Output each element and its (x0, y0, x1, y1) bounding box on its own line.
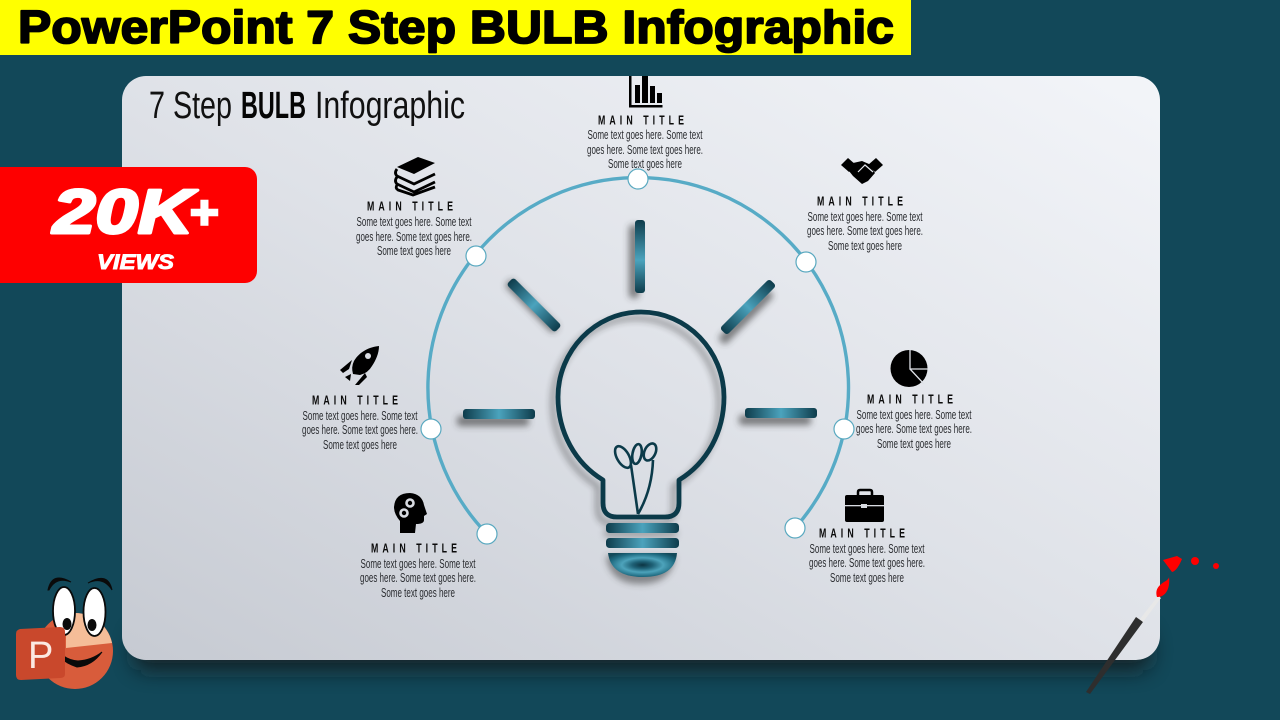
heading: slide title: BULB (241, 85, 306, 127)
step: lower left head: goes here. Some text goes here. (360, 571, 476, 585)
heading: slide title (149, 85, 465, 127)
badge: 20K+ views: 20K (52, 178, 198, 247)
step: right pie (856, 350, 972, 451)
step: upper right handshake: MAIN TITLE (817, 194, 907, 208)
step: top chart: Some text goes here (608, 157, 682, 171)
step: upper left books: Some text goes here (377, 244, 451, 258)
icon: pie chart (890, 350, 928, 387)
step: lower right briefcase (809, 490, 925, 585)
step: upper right handshake: Some text goes here (828, 239, 902, 253)
step: lower left head: Some text goes here (381, 586, 455, 600)
node markers (421, 169, 854, 544)
arc: seven step semicircle (428, 178, 849, 534)
step: right pie: goes here. Some text goes here. (856, 422, 972, 436)
step: upper right handshake: goes here. Some text goes here. (807, 224, 923, 238)
bulb (553, 312, 724, 584)
heading: slide title: 7 Step (149, 85, 232, 127)
light rays (457, 220, 817, 426)
icon: paint brush with splashes (1086, 556, 1219, 694)
step: top chart: Some text goes here. Some text (588, 128, 703, 142)
icon: powerpoint mascot (16, 578, 113, 689)
step: left rocket: MAIN TITLE (312, 392, 402, 408)
step: lower right briefcase: Some text goes here (830, 571, 904, 585)
step: lower left head: Some text goes here. Some text (360, 557, 476, 571)
step: right pie: MAIN TITLE (867, 392, 957, 406)
icon: bar chart (629, 76, 662, 108)
icon: handshake (841, 158, 883, 184)
step: upper right handshake (807, 158, 923, 253)
filament (612, 442, 659, 514)
icon: powerpoint mascot: P (28, 635, 53, 677)
step: left rocket: goes here. Some text goes here. (302, 423, 418, 437)
step: upper right handshake: Some text goes here. Some text (808, 210, 923, 224)
step: upper left books: Some text goes here. Some text (356, 215, 472, 229)
step: left rocket: Some text goes here. Some text (302, 409, 418, 423)
step: lower left head: MAIN TITLE (371, 540, 461, 556)
step: lower right briefcase: Some text goes here. Some text (810, 542, 925, 556)
panel: slide card (122, 76, 1160, 670)
step: upper left books: goes here. Some text goes here. (356, 230, 472, 244)
icon: briefcase (845, 490, 884, 522)
icon: books (396, 157, 435, 195)
step: lower right briefcase: goes here. Some text goes here. (809, 556, 925, 570)
step: upper left books (356, 157, 472, 258)
badge: 20K+ views: + (189, 186, 218, 238)
heading: slide title: Infographic (315, 85, 465, 127)
step: right pie: Some text goes here. Some text (856, 408, 972, 422)
step: right pie: Some text goes here (877, 437, 951, 451)
step: top chart (587, 76, 703, 171)
lamp base (604, 523, 679, 584)
step: upper left books: MAIN TITLE (367, 198, 457, 214)
step: top chart: goes here. Some text goes here. (587, 143, 703, 157)
badge: 20K+ views: VIEWS (97, 251, 174, 274)
step: left rocket: Some text goes here (323, 438, 397, 452)
badge: 20K+ views (0, 167, 257, 283)
step: lower left head (360, 493, 476, 600)
banner: yellow title: PowerPoint 7 Step BULB Infographic (18, 1, 894, 53)
step: lower right briefcase: MAIN TITLE (819, 526, 909, 540)
icon: rocket (340, 346, 379, 385)
icon: head with gears (394, 493, 427, 533)
step: top chart: MAIN TITLE (598, 112, 688, 128)
step: left rocket (302, 346, 418, 452)
